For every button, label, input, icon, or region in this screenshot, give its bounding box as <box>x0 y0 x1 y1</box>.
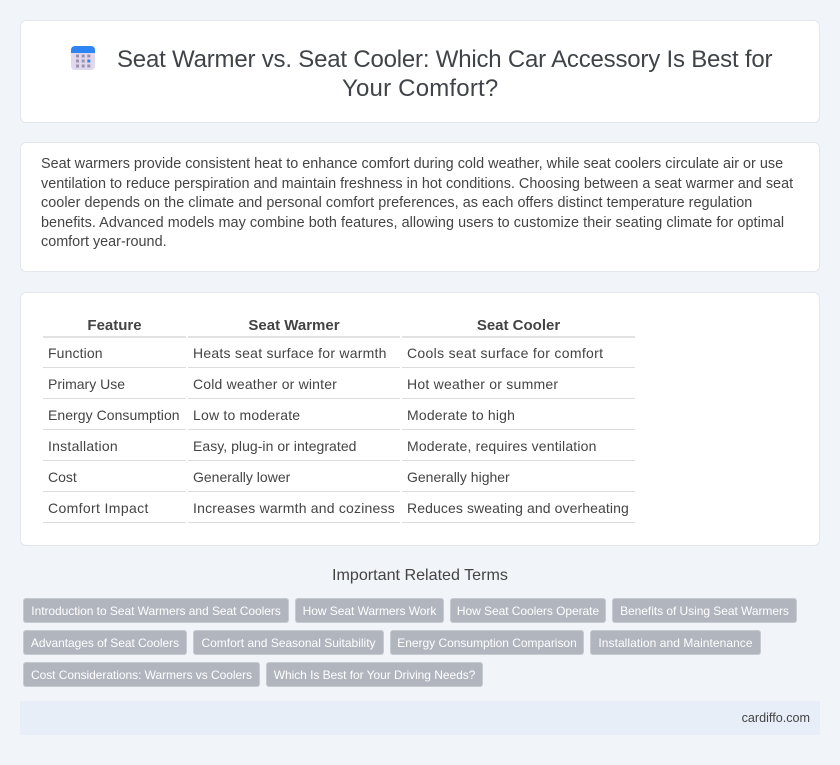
related term tags: Comfort and Seasonal Suitability <box>201 636 376 650</box>
related term tags: Which Is Best for Your Driving Needs? <box>274 668 475 682</box>
intro text: benefits. Advanced models may combine both features, allowing users to customize their seating climate for optimal <box>41 214 784 230</box>
title: Your Comfort? <box>342 75 498 102</box>
table rows: Easy, plug-in or integrated <box>193 438 356 454</box>
panel: title card <box>20 20 820 123</box>
related term tags: Energy Consumption Comparison <box>397 636 577 650</box>
table header row: Seat Warmer <box>248 317 340 334</box>
table rows: Function <box>48 345 103 361</box>
table rows: Reduces sweating and overheating <box>407 500 629 516</box>
footer credit: cardiffo.com <box>742 711 810 725</box>
related terms heading: Important Related Terms <box>332 566 508 584</box>
table rows: Moderate to high <box>407 407 515 423</box>
intro text: ventilation to reduce perspiration and maintain freshness in hot conditions. Choosing between a seat warmer and seat <box>41 176 793 192</box>
table rows <box>43 345 635 523</box>
table rows: Primary Use <box>48 376 125 392</box>
table rows: Cools seat surface for comfort <box>407 345 603 361</box>
table rows: Moderate, requires ventilation <box>407 438 597 454</box>
related term tags: Introduction to Seat Warmers and Seat Coolers <box>31 604 281 618</box>
related term tags: Benefits of Using Seat Warmers <box>620 604 789 618</box>
related term tags: How Seat Coolers Operate <box>457 604 599 618</box>
title: Seat Warmer vs. Seat Cooler: Which Car Accessory Is Best for <box>117 46 772 73</box>
panel: comparison table card <box>20 292 820 546</box>
table rows: Heats seat surface for warmth <box>193 345 387 361</box>
comparison table <box>43 317 635 523</box>
related term tags: Installation and Maintenance <box>598 636 753 650</box>
intro text: cooler depends on the climate and personal comfort preferences, as each offers distinct temperature regulation <box>41 195 752 211</box>
table header row <box>43 317 635 338</box>
related term tags: Cost Considerations: Warmers vs Coolers <box>31 668 252 682</box>
table header row: Seat Cooler <box>477 317 560 334</box>
title <box>117 46 772 102</box>
table rows: Generally higher <box>407 469 510 485</box>
table rows: Comfort Impact <box>48 500 149 516</box>
panel: intro card <box>20 142 820 272</box>
related term tags: How Seat Warmers Work <box>303 604 436 618</box>
table rows: Generally lower <box>193 469 290 485</box>
related term tags: Advantages of Seat Coolers <box>31 636 179 650</box>
intro text: comfort year-round. <box>41 234 167 250</box>
table rows: Cold weather or winter <box>193 376 337 392</box>
table rows: Energy Consumption <box>48 407 180 423</box>
table header row: Feature <box>87 317 142 334</box>
table rows: Increases warmth and coziness <box>193 500 395 516</box>
icon: calendar <box>71 46 95 70</box>
table rows: Installation <box>48 438 118 454</box>
footer bar <box>20 701 820 735</box>
intro text <box>41 156 794 250</box>
table rows: Hot weather or summer <box>407 376 558 392</box>
table rows: Low to moderate <box>193 407 300 423</box>
table rows: Cost <box>48 469 77 485</box>
intro text: Seat warmers provide consistent heat to enhance comfort during cold weather, while seat coolers circulate air or use <box>41 156 783 172</box>
